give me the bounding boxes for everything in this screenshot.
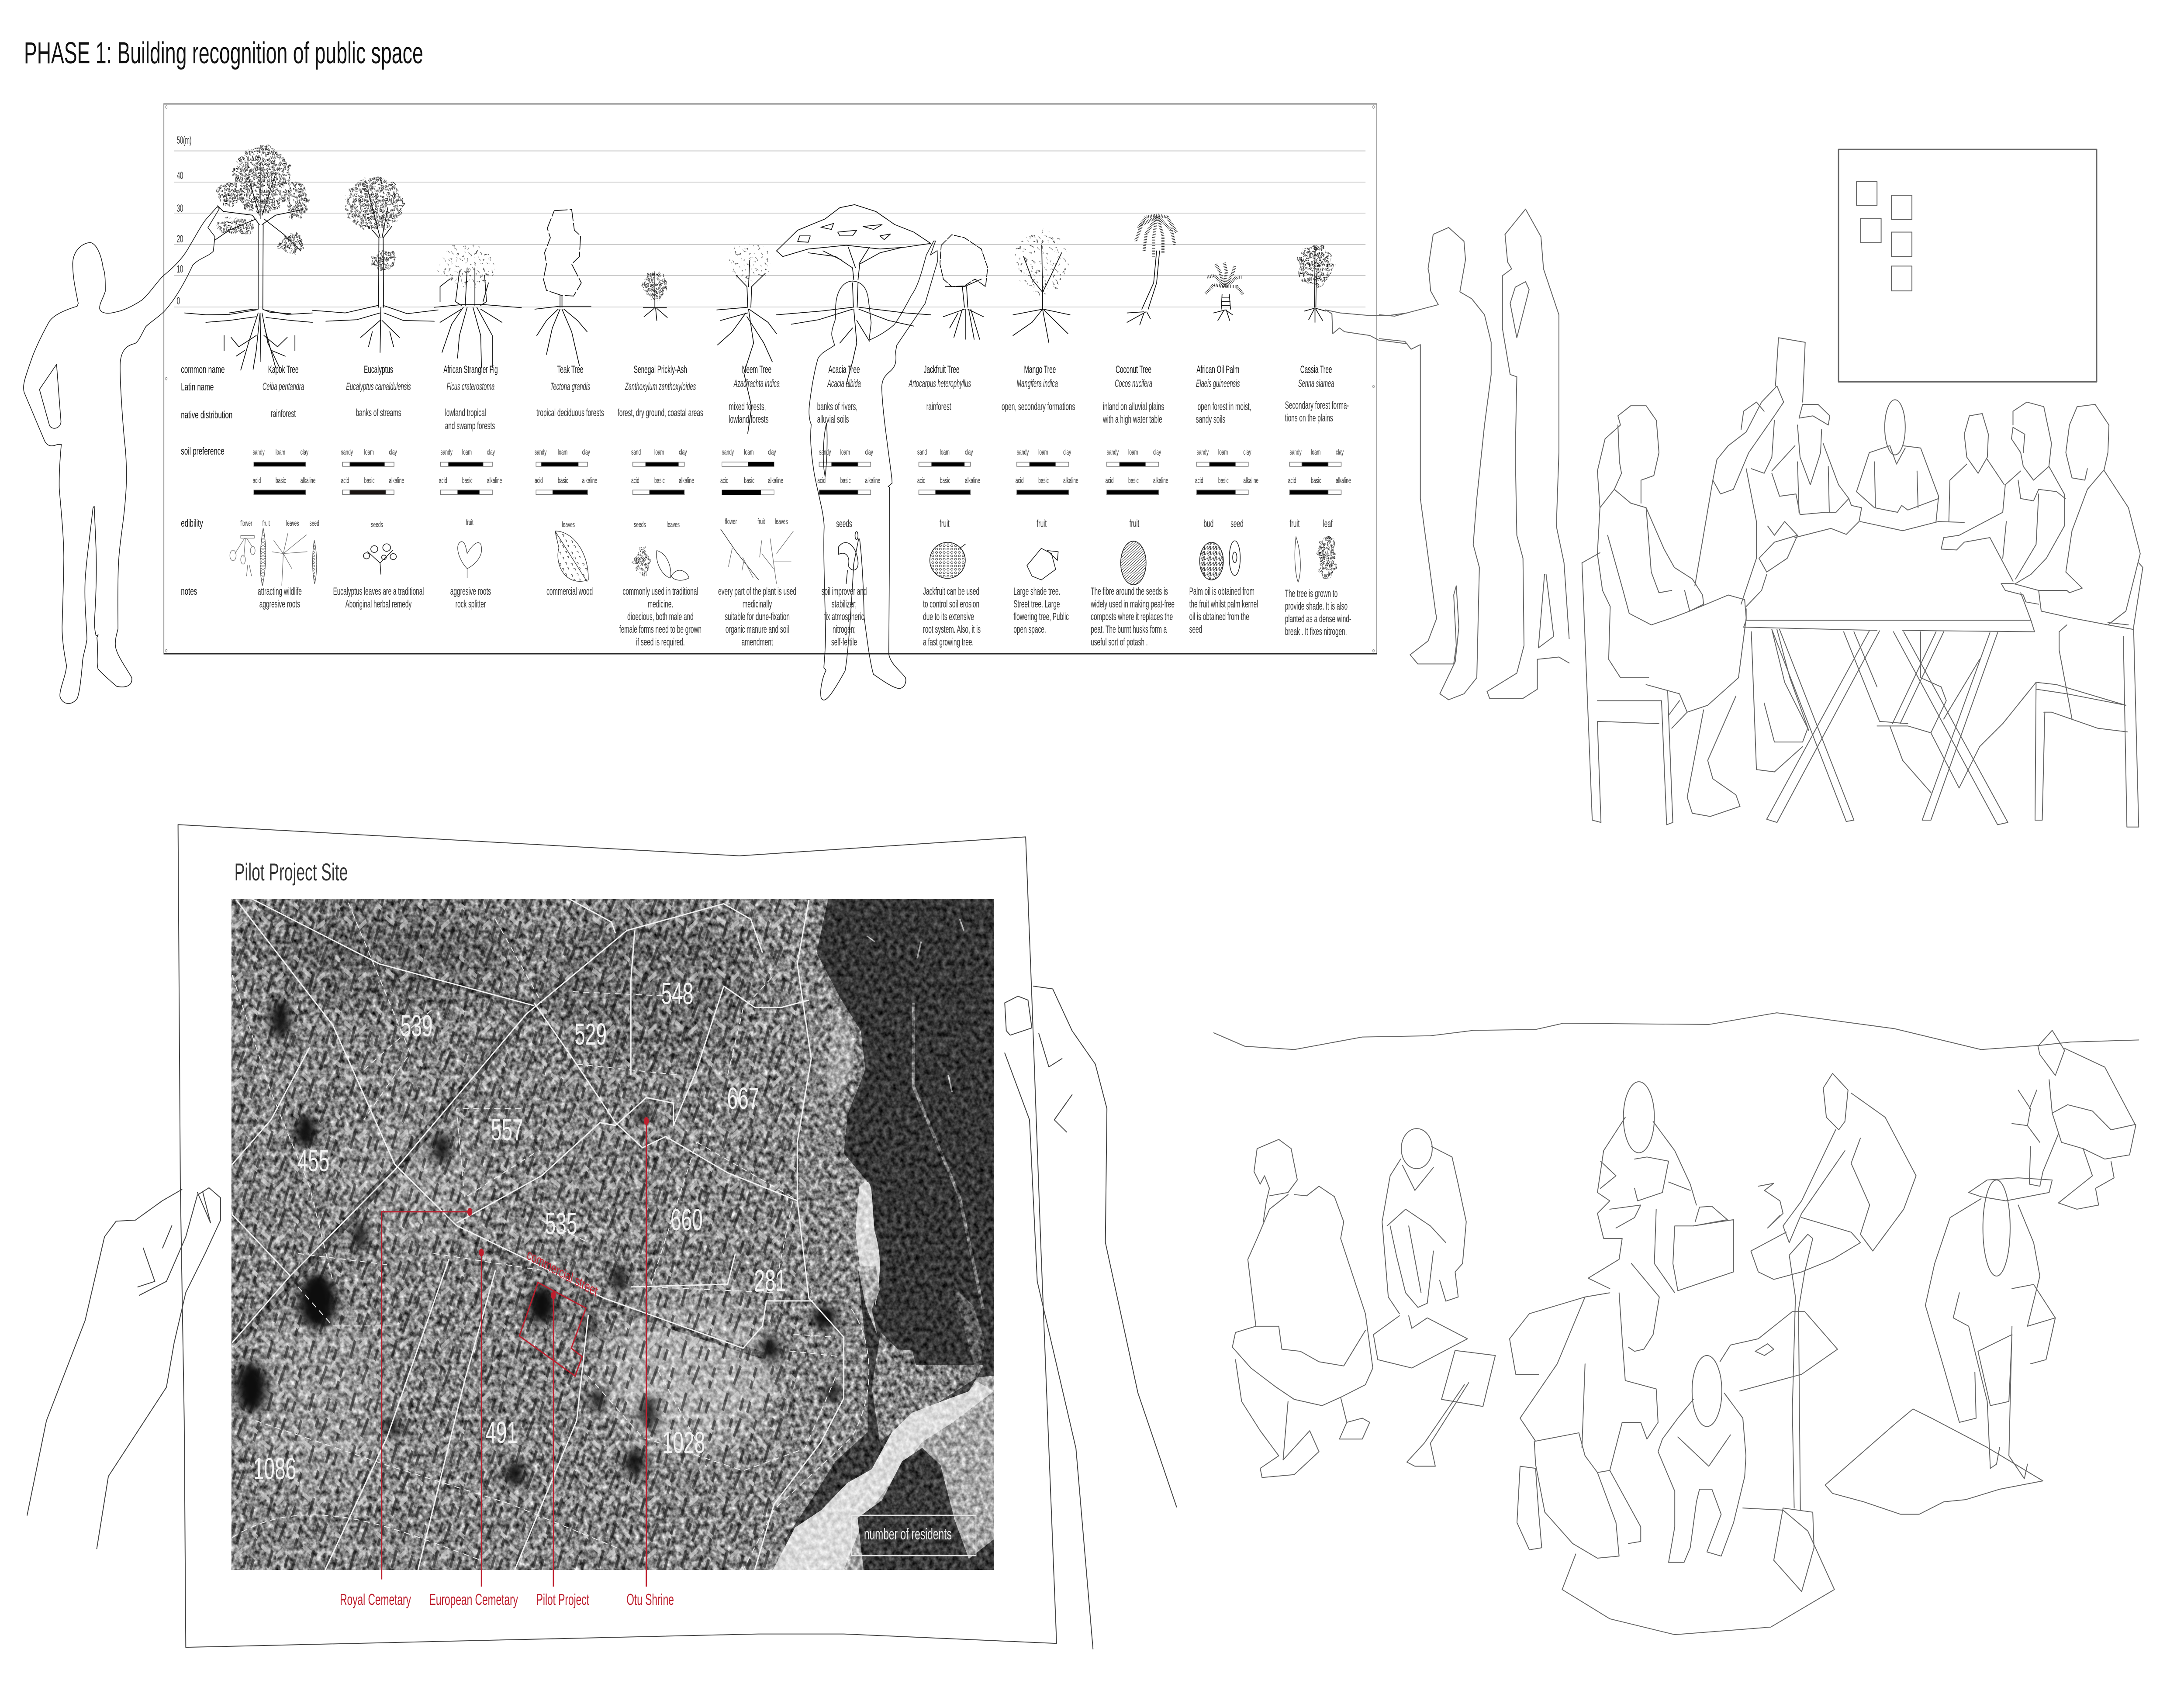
height axis labels: 20 [177,234,183,245]
person holding sapling [1751,1073,1916,1280]
notes text: rock splitter [456,598,486,610]
notes text: medicinally [743,598,772,610]
person squatting far left [1232,1139,1373,1477]
native distribution: mixed forests, [729,401,766,413]
paper outline [178,825,1057,1647]
soil scale labels: sandy [253,448,265,457]
soil scale labels: loam [462,448,472,457]
ground line [1214,1013,2139,1049]
notes text: due to its extensive [923,611,974,623]
species names: Eucalyptus [364,364,393,376]
height axis labels: 40 [177,170,183,182]
edibility labels [240,517,788,529]
notes text: Palm oil is obtained from [1189,586,1254,597]
notes text: organic manure and soil [726,624,789,635]
soil scale labels: clay [1063,448,1071,457]
tree illustrations group left [185,145,771,586]
species names: African Strangler Fig [443,364,498,376]
soil scale labels: loam [276,448,285,457]
notes text: attracting wildlife [258,586,302,597]
species names: African Oil Palm [1196,364,1239,376]
row labels: notes [181,586,197,597]
edibility labels: seeds [371,521,383,529]
native distribution: alluvial soils [817,414,849,425]
soil scale labels: sandy [341,448,353,457]
notes text: aggresive roots [450,586,491,597]
neem edibility sketches [743,531,793,584]
soil scale labels: basic [1128,476,1139,485]
soil scale labels: acid [1106,476,1113,485]
notes text: nitrogen; [833,624,856,635]
soil scale labels: loam [654,448,664,457]
site labels: European Cemetary [429,1591,518,1608]
species names: Jackfruit Tree [924,364,959,376]
notes text: commercial wood [546,586,593,597]
height axis labels: 50(m) [177,135,191,146]
child crouching [1658,1356,1746,1563]
edibility sketch: mango [1027,549,1058,580]
notes text: widely used in making peat-free [1090,598,1175,610]
soil scale labels: loam [940,448,950,457]
native distribution: forest, dry ground, coastal areas [618,407,703,419]
soil scale labels: clay [582,448,590,457]
resident counts: 557 [491,1113,523,1147]
edibility labels: flower [725,517,737,526]
latin names: Acacia albida [827,378,861,390]
soil scale labels: basic [744,476,754,485]
native distribution: open, secondary formations [1002,401,1075,413]
soil scale labels: acid [439,476,447,485]
edibility labels: flower [240,519,252,528]
soil scale labels: loam [558,448,567,457]
site labels: Royal Cemetary [340,1591,411,1608]
height axis labels: 10 [177,264,183,275]
soil scale labels: clay [301,448,308,457]
notes text: a fast growing tree. [923,636,974,648]
figure: left hand holding sheet [27,1188,221,1549]
soil scale labels: acid [253,476,261,485]
latin names: Tectona grandis [550,381,590,393]
tree: senegal prickly-ash [643,271,667,321]
title: PHASE 1: Building recognition of public space [24,36,423,70]
notes text: commonly used in traditional [623,586,698,597]
row labels: Latin name [181,382,214,393]
species names: Acacia Tree [829,364,860,376]
native distribution: banks of streams [356,407,401,419]
soil scale labels: alkaline [389,476,404,485]
soil scale labels: loam [1038,448,1048,457]
tree illustrations group right [743,205,1341,585]
tree: neem [717,243,771,433]
latin names: Elaeis guineensis [1196,378,1240,390]
tree: teak [535,210,591,366]
latin names: Mangifera indica [1016,378,1058,390]
edibility labels: fruit [757,517,765,526]
panel: tree comparison table: bud [1203,518,1213,530]
edibility labels: leaves [775,517,788,526]
soil scale labels: sandy [1017,448,1029,457]
soil scale labels: acid [341,476,349,485]
latin names [263,378,1334,393]
notes text: useful sort of potash . [1091,636,1148,648]
resident counts: 1086 [253,1452,296,1486]
latin names: Ficus craterostoma [447,381,494,393]
notes text: The tree is grown to [1285,588,1337,600]
native distribution [271,400,1349,432]
person with briefcase [1588,1082,1734,1351]
notes text [258,586,1351,648]
neem soil bars [722,462,774,495]
notes text: amendment [742,636,773,648]
native distribution: lowland tropical [445,407,486,419]
notes text: Jackfruit can be used [923,586,979,597]
notes text: Aboriginal herbal remedy [346,598,411,610]
native distribution: and swamp forests [445,420,495,432]
soil scale labels: basic [462,476,473,485]
aerial map [232,899,994,1570]
site labels: Pilot Project [536,1591,589,1608]
edibility labels: leaves [286,519,299,528]
leader end dots [467,1117,649,1299]
resident counts: 281 [754,1264,786,1298]
soil scale labels [253,448,1351,485]
soil scale labels: clay [389,448,397,457]
figure: reaching person centre [809,241,937,700]
kneeling person centre [1510,1293,1658,1558]
resident counts: 455 [297,1144,329,1178]
native distribution: open forest in moist, [1198,401,1251,413]
soil scale labels: loam [1311,448,1320,457]
soil scale labels: basic [940,476,950,485]
soil scale labels: sandy [441,448,453,457]
legend: number of residents [852,1515,976,1556]
notes text: fix atmospheric [824,611,864,623]
soil scale labels: alkaline [1153,476,1168,485]
soil scale labels: sandy [1290,448,1302,457]
soil scale labels: alkaline [301,476,315,485]
soil scale labels: clay [1153,448,1161,457]
figure: right hand holding sheet [1005,986,1177,1649]
notes text: self-fertile [831,636,857,648]
person digging with spade [1373,1128,1495,1466]
species names [268,364,1332,376]
notes text: flowering tree, Public [1013,611,1069,623]
panel: tree comparison table: leaf [1323,518,1333,530]
notes text: provide shade. It is also [1285,600,1348,612]
panel frame [164,104,1377,654]
soil scale labels: sand [917,448,927,457]
notes text: peat. The burnt husks form a [1091,624,1167,635]
species names: Mango Tree [1024,364,1056,376]
edibility sketch: fig fruit [458,542,482,578]
sea and beach [796,899,994,1432]
soil scale labels: sandy [1197,448,1209,457]
soil scale labels: alkaline [679,476,694,485]
scene: meeting around table [1582,149,2143,827]
soil scale labels: acid [535,476,543,485]
height axis labels: 30 [177,203,183,214]
resident counts: 535 [545,1207,577,1241]
notes text: soil improver and [822,586,867,597]
edibility sketch: senegal seeds and leaves [635,549,689,580]
edibility labels: seed [310,519,319,528]
resident counts: 1028 [662,1426,705,1460]
soil mound front [1562,1508,1835,1635]
figure: pointing man left [24,207,219,704]
soil scale labels: clay [679,448,687,457]
notes text: if seed is required. [636,636,685,648]
species names: Kapok Tree [268,364,298,376]
tree: african oil palm [1205,262,1243,321]
notes text: every part of the plant is used [718,586,796,597]
tree: mango [1013,230,1070,343]
native distribution: rainforest [926,401,951,413]
soil preference bars left [254,462,684,494]
latin names: Azadirachta indica [733,378,780,390]
notes text: seed [1189,624,1202,635]
native distribution: with a high water table [1102,414,1162,425]
species names: Coconut Tree [1116,364,1151,376]
surf and lagoon [773,1266,994,1570]
latin names: Ceiba pentandra [263,381,304,393]
soil scale labels: basic [840,476,851,485]
native distribution: tions on the plains [1285,412,1333,424]
edibility sketch: teak leaf [555,531,588,582]
tree canopy blobs [236,1000,840,1486]
soil scale labels: acid [1288,476,1296,485]
soil scale labels: basic [558,476,568,485]
soil scale labels: sandy [535,448,547,457]
height axis labels [177,135,191,307]
resident counts: 529 [574,1018,607,1052]
notes text: dioecious, both male and [627,611,694,623]
native distribution: lowland forests [729,414,769,425]
soil preference bars right [819,462,1341,494]
soil scale labels: loam [744,448,753,457]
panel: tree comparison table: fruit [1130,518,1140,530]
soil scale labels: basic [654,476,665,485]
building shadows texture [232,899,814,1570]
notes text: female forms need to be grown [619,624,702,635]
person planting top right [2012,1030,2136,1209]
map heading: Pilot Project Site [235,859,348,886]
edibility sketch: coconut [1121,541,1146,585]
tree: coconut [1127,215,1176,325]
soil scale labels: acid [1195,476,1203,485]
species names: Cassia Tree [1300,364,1332,376]
resident counts: 539 [401,1009,433,1043]
native distribution: tropical deciduous forests [536,407,604,419]
tall shovel [1774,1234,1814,1592]
edibility sketch: neem flower [721,529,759,580]
edibility sketch: jackfruit [930,542,965,578]
notes text: root system. Also, it is [923,624,981,635]
edibility sketch: acacia pod [839,542,858,584]
soil scale labels: clay [487,448,495,457]
tree: jackfruit [940,235,988,339]
soil scale labels: sandy [819,448,831,457]
edibility labels: leaves [667,521,680,529]
neem roots right [747,309,777,362]
soil scale labels: alkaline [582,476,597,485]
soil scale labels: clay [1243,448,1251,457]
soil scale labels: acid [1016,476,1024,485]
pilot site outline and leader lines [382,1121,646,1587]
person bending right [1925,1178,2055,1479]
figure: pointing person arm [1326,310,1407,344]
tree: kapok [185,145,312,370]
edibility sketches: kapok [230,528,317,586]
edibility labels: fruit [263,519,270,528]
soil scale labels: acid [917,476,926,485]
native distribution: inland on alluvial plains [1103,401,1164,413]
row labels: native distribution [181,410,232,421]
panel: tree comparison table [164,104,1377,654]
height axis labels: 0 [177,296,180,307]
soil scale labels: basic [364,476,375,485]
notes text: open space. [1013,624,1046,635]
species names: Senegal Prickly-Ash [634,364,687,376]
edibility sketch: palm bud and seed [1200,541,1240,580]
soil scale labels: sandy [1107,448,1119,457]
notes text: aggresive roots [259,598,300,610]
soil mound right [1825,1409,2043,1515]
soil scale labels: basic [1311,476,1321,485]
soil scale labels: alkaline [865,476,880,485]
site labels: Otu Shrine [626,1591,674,1608]
row labels: edibility [181,518,203,529]
commercial street label: commercial street [525,1246,599,1300]
panel: tree comparison table: fruit [940,518,950,530]
soil scale labels: acid [720,476,729,485]
soil scale labels: clay [865,448,873,457]
species names: Neem Tree [742,364,771,376]
soil scale labels: clay [1336,448,1344,457]
soil scale labels: alkaline [1243,476,1258,485]
notes text: oil is obtained from the [1189,611,1249,623]
soil scale labels: clay [965,448,973,457]
resident counts: 491 [485,1416,518,1450]
native distribution: banks of rivers, [817,401,857,413]
notes text: break . It fixes nitrogen. [1285,626,1347,638]
notes text: the fruit whilst palm kernel [1189,598,1258,610]
soil scale labels: alkaline [965,476,980,485]
edibility sketch: eucalyptus seeds [363,544,396,574]
soil scale labels: basic [1038,476,1049,485]
notes text: to control soil erosion [923,598,979,610]
site labels [340,1591,674,1608]
latin names: Eucalyptus camaldulensis [346,381,411,393]
row labels [181,364,232,597]
soil scale labels: loam [1128,448,1138,457]
panel: tree comparison table: seed [1230,518,1244,530]
soil scale labels: sand [631,448,641,457]
panel: tree comparison table: seeds [836,518,852,530]
species names: Teak Tree [557,364,583,376]
edibility sketch: cassia fruit and leaf [1295,535,1336,582]
edibility labels: leaves [562,521,575,529]
soil mound middle [1720,1311,1838,1391]
edibility labels: fruit [466,518,473,527]
native distribution: sandy soils [1196,414,1225,425]
resident counts: 660 [670,1203,703,1237]
soil scale labels: alkaline [487,476,502,485]
soil scale labels: acid [817,476,826,485]
people and table outlines [1582,338,2143,827]
soil scale labels: clay [768,448,776,457]
soil scale labels: basic [276,476,286,485]
photographic noise [232,899,994,1570]
neighbourhood dashed boundaries [232,903,869,1570]
notes text: stabilizer; [832,598,857,610]
figures: two standing people right [1379,209,1569,700]
tree: eucalyptus [312,178,438,352]
notes text: Large shade tree. [1013,586,1060,597]
tree: cassia [1297,245,1333,322]
native distribution: rainforest [271,408,296,420]
soil scale labels: loam [1218,448,1228,457]
notes text: planted as a dense wind- [1285,613,1351,625]
wall board with notes [1838,149,2097,382]
notes text: medicine. [648,598,673,610]
panel: tree comparison table: fruit [1037,518,1047,530]
soil scale labels: alkaline [768,476,783,485]
soil scale labels: basic [1218,476,1229,485]
road bands [232,903,766,1356]
soil scale labels: loam [364,448,374,457]
road lines [232,899,844,1570]
sheet: pilot project site map [178,825,1057,1647]
notes text: Eucalyptus leaves are a traditional [333,586,424,597]
notes text: suitable for dune-fixation [725,611,790,623]
resident counts: 667 [727,1082,759,1116]
row labels: soil preference [181,446,225,457]
row labels: common name [181,364,225,376]
scene: community planting [1214,1013,2139,1635]
soil scale labels: loam [840,448,850,457]
soil scale labels: sandy [722,448,734,457]
latin names: Artocarpus heterophyllus [909,378,971,390]
tree: acacia [777,205,931,384]
soil scale labels: alkaline [1336,476,1351,485]
panel: tree comparison table: fruit [1290,518,1300,530]
resident counts [253,977,786,1486]
notes text: composts where it replaces the [1091,611,1173,623]
latin names: Senna siamea [1298,378,1334,390]
notes text: Street tree. Large [1013,598,1060,610]
resident counts: 548 [661,977,693,1011]
latin names: Cocos nucifera [1115,378,1152,390]
edibility labels: seeds [634,521,646,529]
soil scale labels: alkaline [1063,476,1078,485]
native distribution: Secondary forest forma- [1285,400,1349,411]
land tone variation [245,900,778,1494]
notes text: The fibre around the seeds is [1091,586,1168,597]
latin names: Zanthoxylum zanthoxyloides [625,381,696,393]
legend: number of residents: number of residents [864,1526,952,1543]
soil scale labels: acid [631,476,639,485]
tree: african strangler fig [434,245,522,367]
